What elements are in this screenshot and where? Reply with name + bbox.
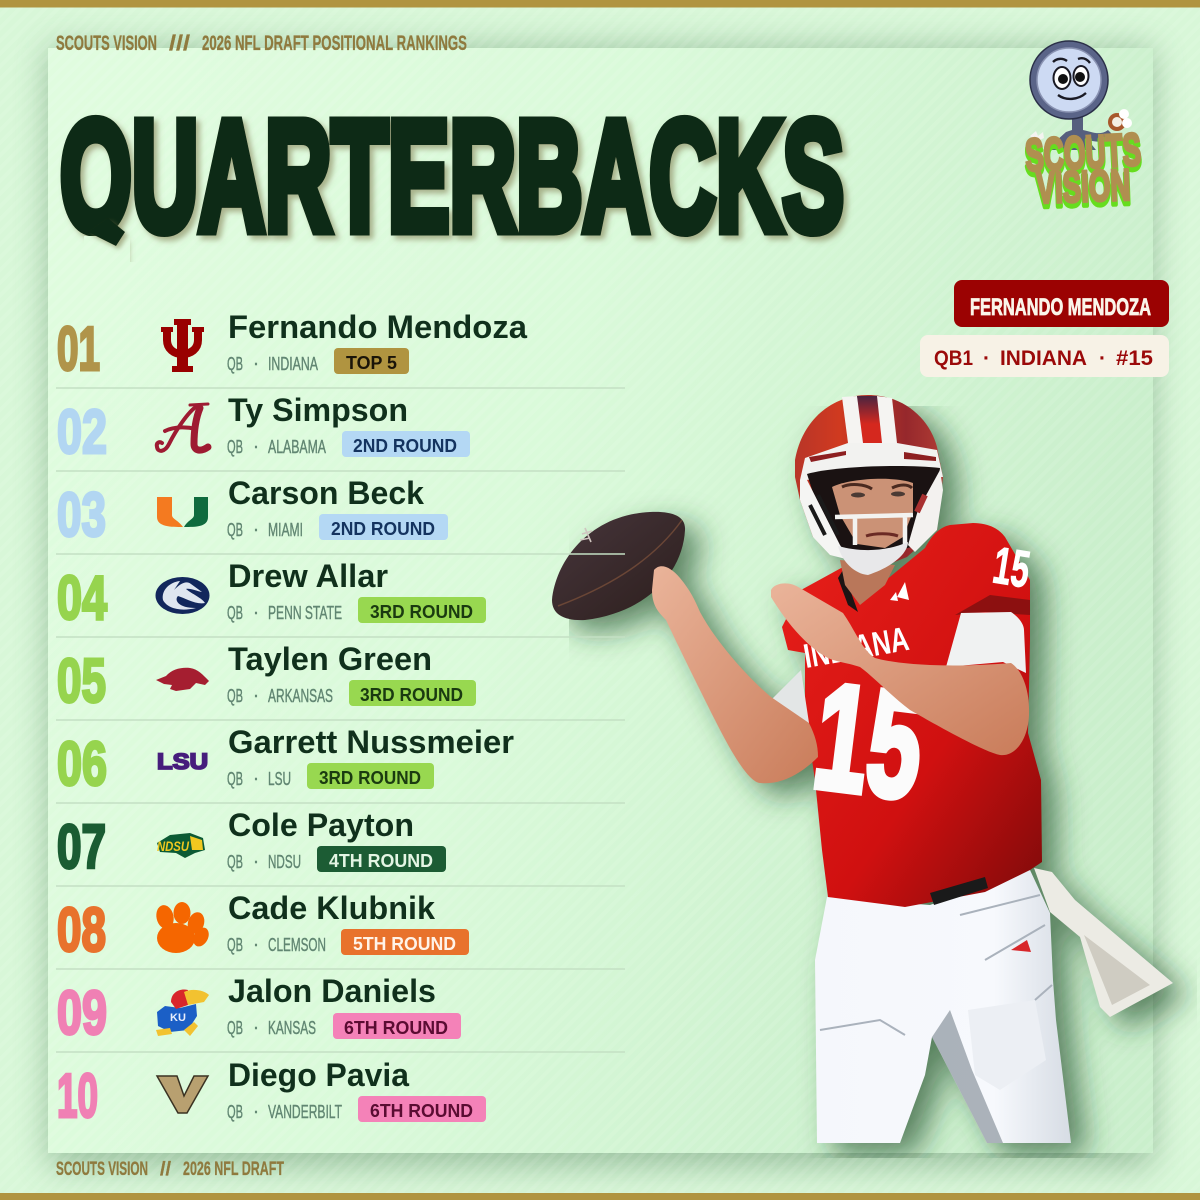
meta: LSU: [268, 769, 291, 789]
footer: [56, 1159, 284, 1180]
meta: PENN STATE: [268, 603, 342, 623]
header line: [56, 32, 467, 55]
meta: ·: [253, 1101, 259, 1121]
meta: MIAMI: [268, 520, 303, 540]
name: Drew Allar: [228, 558, 388, 594]
meta: ·: [253, 768, 259, 788]
badge: [349, 680, 476, 706]
icon: Miami logo: [157, 497, 208, 527]
rank: 02: [57, 398, 107, 467]
player: Fernando Mendoza in red Indiana uniform throwing a football: [552, 395, 1173, 1143]
meta: [227, 851, 301, 872]
badge: [317, 846, 446, 872]
rank: 10: [57, 1062, 98, 1131]
meta: QB: [227, 437, 243, 457]
meta: QB: [227, 935, 243, 955]
name: Diego Pavia: [228, 1057, 409, 1093]
meta: QB: [227, 686, 243, 706]
meta: QB: [227, 1102, 243, 1122]
name: Cade Klubnik: [228, 890, 435, 926]
badge: [333, 1013, 461, 1039]
icon: Vanderbilt logo: [157, 1076, 208, 1113]
badge: [341, 929, 469, 955]
rank: 08: [57, 896, 106, 965]
row 7: [57, 807, 446, 882]
badge: 2ND ROUND: [353, 436, 457, 456]
wordmark: [1024, 123, 1142, 217]
meta: ·: [253, 436, 259, 456]
wordmark: VISION: [1036, 161, 1131, 213]
rankings list: [56, 309, 625, 1131]
badge: 3RD ROUND: [319, 768, 421, 788]
meta: [227, 1017, 316, 1038]
icon: magnifying glass mascot: [1030, 41, 1132, 150]
footer: //: [160, 1159, 172, 1180]
meta: ALABAMA: [268, 437, 326, 457]
icon: Kansas logo: KU: [170, 1012, 186, 1024]
badge: 6TH ROUND: [344, 1018, 448, 1038]
row 8: [57, 890, 469, 965]
wordmark: VISION: [1036, 165, 1131, 217]
rank: 06: [57, 730, 107, 799]
badge: 4TH ROUND: [329, 851, 433, 871]
meta: KANSAS: [268, 1018, 316, 1038]
name: Garrett Nussmeier: [228, 724, 514, 760]
row 2: [57, 392, 470, 467]
meta: ·: [253, 602, 259, 622]
meta: ·: [253, 1017, 259, 1037]
icon: Arkansas logo: [156, 668, 209, 691]
badge: [342, 431, 470, 457]
name: Jalon Daniels: [228, 973, 436, 1009]
row 9: [57, 973, 461, 1048]
meta: INDIANA: [268, 354, 318, 374]
meta: [227, 436, 326, 457]
name: Taylen Green: [228, 641, 432, 677]
icon: Penn State logo: [156, 577, 210, 614]
row 5: [57, 641, 476, 716]
meta: [227, 685, 333, 706]
meta: QB: [227, 852, 243, 872]
badge: [334, 348, 409, 374]
player info pill: ·: [983, 347, 990, 370]
meta: CLEMSON: [268, 935, 326, 955]
meta: QB: [227, 769, 243, 789]
meta: VANDERBILT: [268, 1102, 342, 1122]
icon: Indiana logo: [161, 319, 204, 372]
icon: Clemson logo: [154, 902, 212, 953]
meta: QB: [227, 603, 243, 623]
meta: ·: [253, 851, 259, 871]
player info pill: #15: [1116, 347, 1153, 370]
icon: NDSU logo: NDSU: [157, 838, 190, 854]
badge: 6TH ROUND: [370, 1101, 473, 1121]
icon: NDSU logo: [157, 833, 205, 858]
icon: Kansas logo: [156, 990, 209, 1036]
title: [60, 114, 851, 262]
rank: 04: [57, 564, 107, 633]
badge: [358, 1096, 486, 1122]
badge: [319, 514, 448, 540]
badge: 5TH ROUND: [353, 934, 456, 954]
meta: QB: [227, 520, 243, 540]
meta: [227, 519, 303, 540]
name: Fernando Mendoza: [228, 309, 527, 345]
meta: QB: [227, 1018, 243, 1038]
player info pill: QB1: [934, 347, 973, 370]
player drop shadow: [552, 395, 1173, 1143]
meta: ARKANSAS: [268, 686, 333, 706]
meta: [227, 1101, 342, 1122]
row 1: [57, 309, 527, 384]
rank: 07: [57, 813, 106, 882]
badge: [307, 763, 434, 789]
player info pill: [920, 335, 1169, 377]
name: Cole Payton: [228, 807, 414, 843]
bottom gold bar: [0, 1193, 1200, 1200]
row 3: [57, 475, 448, 550]
footer: 2026 NFL DRAFT: [183, 1159, 284, 1180]
badge: 3RD ROUND: [360, 685, 463, 705]
header line: ///: [169, 32, 190, 55]
name: Carson Beck: [228, 475, 424, 511]
meta: [227, 934, 326, 955]
row 6: [57, 724, 514, 799]
meta: NDSU: [268, 852, 301, 872]
footer: SCOUTS VISION: [56, 1159, 148, 1180]
player info pill: ·: [1099, 347, 1106, 370]
meta: ·: [253, 685, 259, 705]
icon: Alabama logo: [157, 404, 208, 451]
rank: 03: [57, 481, 106, 550]
header line: SCOUTS VISION: [56, 32, 157, 55]
meta: [227, 768, 291, 789]
meta: [227, 602, 342, 623]
header line: 2026 NFL DRAFT POSITIONAL RANKINGS: [202, 32, 467, 55]
badge: [358, 597, 486, 623]
meta: ·: [253, 519, 259, 539]
badge: 2ND ROUND: [331, 519, 435, 539]
row 10: [57, 1057, 486, 1131]
meta: ·: [253, 934, 259, 954]
meta: QB: [227, 354, 243, 374]
player info pill: INDIANA: [1000, 347, 1087, 370]
meta: [227, 353, 318, 374]
rank: 05: [57, 647, 106, 716]
brand logo: Scouts Vision mascot: [1024, 41, 1142, 217]
badge: TOP 5: [346, 353, 397, 373]
row 4: [57, 558, 486, 633]
rank: 09: [57, 979, 107, 1048]
badge: 3RD ROUND: [370, 602, 473, 622]
icon: LSU logo: LSU: [157, 749, 208, 774]
rank: 01: [57, 315, 100, 384]
name: Ty Simpson: [228, 392, 408, 428]
top gold bar: [0, 0, 1200, 8]
player name plate: [954, 280, 1169, 327]
meta: ·: [253, 353, 259, 373]
